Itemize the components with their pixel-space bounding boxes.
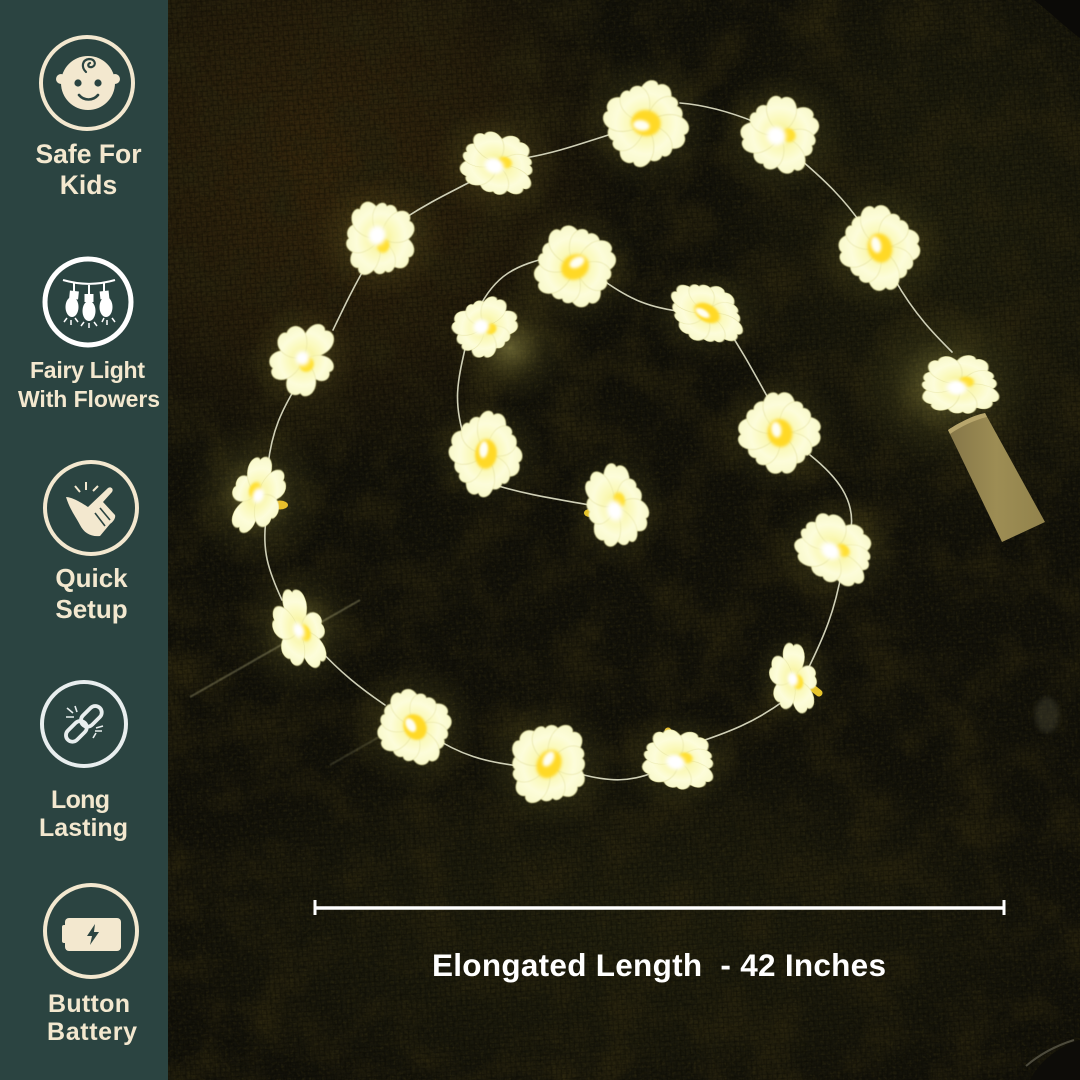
- flower 4: [916, 349, 1007, 419]
- flower 15: [730, 384, 829, 482]
- flower 9: [259, 580, 338, 681]
- sidebar panel: [0, 0, 168, 1080]
- flower 11: [490, 705, 606, 823]
- feature: button battery: [45, 885, 137, 1046]
- label: quick setup: Setup: [55, 594, 128, 624]
- silver wire string: [265, 103, 952, 780]
- label: long lasting: Long: [51, 786, 110, 814]
- flower 3: [827, 194, 932, 302]
- feature: safe for kids: [35, 37, 142, 200]
- flower 14: [781, 497, 892, 603]
- flower 19: [444, 406, 527, 501]
- feature: quick setup: [45, 462, 137, 624]
- flower 16: [656, 266, 758, 360]
- feature: fairy light with flowers: [18, 259, 160, 412]
- flower 10: [361, 673, 468, 781]
- flower 1: [594, 71, 697, 176]
- flower 8: [219, 447, 298, 544]
- length caption: Elongated Length - 42 Inches: [432, 947, 886, 983]
- icon: chain link: [42, 682, 126, 766]
- label: long lasting: Lasting: [39, 814, 128, 842]
- icon: baby face: [41, 37, 133, 129]
- flower 18: [441, 284, 532, 371]
- icon: snapping hand: [45, 462, 137, 554]
- flower 20: [574, 453, 660, 556]
- length dimension bar: [315, 900, 1004, 915]
- label: button battery: Button: [48, 990, 130, 1018]
- label: quick setup: Quick: [55, 563, 128, 593]
- flower 17: [516, 208, 634, 325]
- icon: battery: [45, 885, 137, 977]
- battery cork: [948, 413, 1045, 542]
- flower 6: [337, 194, 425, 287]
- flower 2: [726, 78, 840, 192]
- label: safe for kids: Safe For: [35, 139, 142, 169]
- label: fairy light with flowers: With Flowers: [18, 386, 160, 412]
- label: fairy light with flowers: Fairy Light: [30, 357, 145, 383]
- flower 7: [255, 308, 349, 409]
- flower 13: [762, 638, 823, 721]
- label: button battery: Battery: [47, 1018, 137, 1046]
- flower 5: [450, 119, 549, 208]
- flower 12: [634, 719, 727, 800]
- feature: long lasting: [39, 682, 128, 842]
- light glow on cloth: [185, 52, 1040, 830]
- label: safe for kids: Kids: [60, 170, 117, 200]
- icon: string lights: [45, 259, 131, 345]
